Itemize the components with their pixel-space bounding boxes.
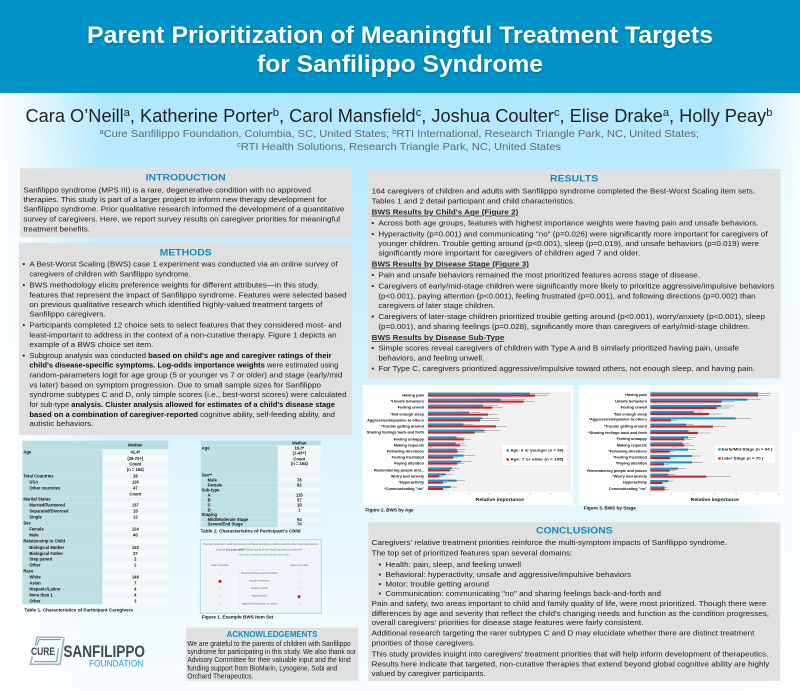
authors: Cara O’Neill <box>26 106 123 126</box>
methods bullet list: for sub-type analysis. Cluster analysis allowed for estimates of a child's disease stage <box>29 400 335 409</box>
acknowledgements text: syndrome for participating in this study. We also thank our <box>187 647 356 656</box>
results by disease stage: caregivers of later stage children. <box>378 301 495 310</box>
conclusions text: Caregivers' relative treatment priorities reinforce the multi-symptom impacts of Sanfilippo syndrome. <box>372 538 727 547</box>
introduction text: therapies. This study is part of a larger project to inform new therapy development for <box>23 195 327 204</box>
authors: c <box>554 107 560 119</box>
category labels: Worry and anxiety <box>391 474 425 478</box>
authors: , Katherine Porter <box>130 106 273 126</box>
table 1: characteristics of participant caregivers: Total Countries <box>23 474 54 479</box>
table 2: characteristics of participant's child: 82 <box>297 483 302 488</box>
table 1: characteristics of participant caregivers: Other <box>29 563 41 568</box>
table 1: characteristics of participant caregivers: Count <box>129 492 142 497</box>
table 1: characteristics of participant caregivers: Race <box>23 569 34 574</box>
logo: Cure Sanfilippo Foundation: FOUNDATION <box>89 658 143 668</box>
category labels <box>587 393 648 491</box>
conclusions text: Behavioral: hyperactivity, unsafe and aggressive/impulsive behaviors <box>385 570 631 579</box>
table 1: characteristics of participant caregivers: (28-70+) <box>127 456 144 461</box>
category labels: *Trouble getting around <box>604 424 648 428</box>
results by child's age: ▪ <box>371 230 374 239</box>
acknowledgements text: funding support from BioMarin, Lysogene, Sobi and <box>187 663 337 672</box>
table 1: characteristics of participant caregivers: 148 <box>132 575 139 580</box>
affiliations: b <box>392 129 396 136</box>
x axis: 5 <box>757 494 759 496</box>
legend <box>714 445 775 463</box>
figure 1: example BWS item set: Most important <box>211 563 229 567</box>
conclusions text: Results here indicate that targeted, non-curative therapies that extend beyond global cognitive ability are highly <box>372 660 769 669</box>
table 2: characteristics of participant's child: B <box>208 497 211 502</box>
table 1: characteristics of participant caregivers: White <box>29 575 41 580</box>
table 2: characteristics of participant's child: C <box>208 502 211 507</box>
results by disease sub-type <box>371 333 755 373</box>
results by child's age: significantly more important for caregivers of children aged 7 and older. <box>378 249 640 258</box>
conclusions text: Motor: trouble getting around <box>385 580 489 589</box>
table 1: characteristics of participant caregivers: 4 <box>134 593 137 598</box>
category labels: Paying attention <box>394 462 425 466</box>
table 1: characteristics of participant caregivers: More than 1 <box>29 593 53 598</box>
panel: introduction <box>20 168 352 237</box>
category labels: *Not enough sleep <box>613 412 648 416</box>
affiliations: Cure Sanfilippo Foundation, Columbia, SC, United States; <box>104 128 392 140</box>
table 1 caption: Table 1. Characteristics of Participant Caregivers <box>24 608 134 613</box>
table 1: characteristics of participant caregivers: Single <box>29 515 42 520</box>
figure 1: example BWS item set: improve for your child? Which would be the least important to improve? <box>216 547 303 551</box>
results by disease sub-type: BWS Results by Disease Sub-Type <box>372 333 504 342</box>
results by disease sub-type: behaviors, and feeling unwell. <box>378 353 484 362</box>
series: early/mid-stage <box>650 392 758 488</box>
results by disease stage: Pain and unsafe behaviors remained the most prioritized features across stage of disease. <box>378 271 700 280</box>
category labels: Making requests <box>617 444 647 448</box>
table 2: characteristics of participant's child: Sex** <box>202 473 213 478</box>
category labels: Remembering people and... <box>374 468 424 472</box>
x axis: 1 <box>671 494 672 496</box>
heading: introduction: INTRODUCTION <box>146 173 226 183</box>
legend: Later Stage (n = 70 ) <box>722 457 764 461</box>
figure 1: example BWS item set: Unsafe behaviors <box>249 578 270 582</box>
table 1: characteristics of participant caregivers: 19 <box>133 474 138 479</box>
x axis: 3 <box>489 494 491 496</box>
category labels: Feeling unhappy <box>394 437 425 441</box>
category labels: *Hyperactivity <box>398 481 425 485</box>
acknowledgements text <box>187 639 356 680</box>
methods bullet list: least-important to address in the context of a non-curative therapy. Figure 1 depicts an <box>29 331 337 340</box>
results by disease stage: Caregivers of later-stage children prioritized trouble getting around (p<0.001), worry/anxiety (p<0.001), sleep <box>378 312 765 321</box>
table 1: characteristics of participant caregivers: 40 <box>133 533 138 538</box>
category labels: *Worry and anxiety <box>612 475 648 479</box>
authors: , Holly Peay <box>669 106 766 126</box>
logo: Cure Sanfilippo Foundation <box>30 637 145 668</box>
figure 1: example BWS item set: Least important <box>290 563 308 567</box>
category labels: *Paying attention <box>616 462 648 466</box>
acknowledgements text: Advisory Committee for their valuable input and the kind <box>187 655 351 664</box>
conclusions text: ▪ <box>378 580 381 589</box>
methods bullet list: random-parameters logit for age group (5 or younger vs 7 or older) and stage (early/mid <box>29 371 342 380</box>
table 1: characteristics of participant caregivers: Step parent <box>29 557 53 562</box>
table 2: characteristics of participant's child: Median <box>292 441 307 446</box>
legend: Age: 6 or younger (n = 39) <box>510 449 564 453</box>
series: age 6 or younger <box>428 393 530 488</box>
figure 3: BWS by stage bar chart <box>578 385 785 505</box>
category labels: Feeling frustrated <box>392 456 425 460</box>
table 1: characteristics of participant caregivers: Separated/Divorced <box>29 509 69 514</box>
table 1: characteristics of participant caregivers: 37 <box>133 551 138 556</box>
panel: acknowledgements <box>186 628 358 681</box>
category labels: Following directions <box>387 450 424 454</box>
methods bullet list: vs later) based on symptom progression. Due to small sample sizes for Sanfilippo <box>29 380 321 389</box>
table 1: characteristics of participant caregivers: Marital Status <box>23 497 51 502</box>
table 1: characteristics of participant caregivers: USA <box>29 480 38 485</box>
figure 1: example BWS item set: If a new treatment could improve one of these symptoms, which would be the most important to <box>203 542 318 546</box>
methods bullet list: caregivers of children with Sanfilippo syndrome. <box>29 270 191 279</box>
table 1: characteristics of participant caregivers: 4 <box>134 587 137 592</box>
affiliations: RTI Health Solutions, Research Triangle Park, NC, United States <box>241 141 561 153</box>
conclusions text: overall caregivers' priorities for disease stage features were fairly consistent. <box>372 618 643 627</box>
table 1: characteristics of participant caregivers: 15 <box>133 509 138 514</box>
category labels: *Feeling frustrated <box>613 456 648 460</box>
category labels: Feeling unwell <box>398 406 424 410</box>
logo: Cure Sanfilippo Foundation: CURE <box>31 646 55 658</box>
methods bullet list <box>22 260 347 428</box>
methods bullet list: ▪ <box>22 260 25 269</box>
results intro: Tables 1 and 2 detail participant and child characteristics. <box>372 197 575 206</box>
category labels: Hyperactivity <box>623 481 648 485</box>
table 1: characteristics of participant caregivers: 41.4* <box>130 450 141 455</box>
table 2: characteristics of participant's child: Age <box>202 445 210 450</box>
title: for Sanfilippo Syndrome <box>257 51 543 78</box>
table 2: characteristics of participant's child: 70 <box>297 522 302 527</box>
x axis <box>427 494 572 502</box>
results by disease stage: Caregivers of early/mid-stage children were significantly more likely to prioritize aggressive/impulsive behaviors <box>378 282 774 291</box>
methods bullet list: ▪ <box>22 351 25 360</box>
category labels: Communicating "no" <box>609 487 647 491</box>
table 1: characteristics of participant caregivers: Hispanic/Latino <box>29 587 61 592</box>
table 1: characteristics of participant caregivers: Sex <box>23 521 31 526</box>
category labels: Unsafe behaviors <box>615 400 647 404</box>
authors: b <box>766 107 772 119</box>
category labels: Aggressive/impulsive to others <box>367 418 424 422</box>
authors: b <box>273 107 279 119</box>
results by child's age: Across both age groups, features with highest importance weights were having pain and unsafe behaviors. <box>378 219 758 228</box>
category labels: *Unsafe behaviors <box>391 400 424 404</box>
legend: Early/Mid-Stage (n = 94 ) <box>722 448 773 452</box>
methods bullet list: syndrome subtypes C and D, only simple scores (i.e., best-worst scores) were calculated <box>29 390 347 399</box>
table 1: characteristics of participant caregivers: Biological Father <box>29 551 63 556</box>
series: later stage <box>650 394 758 490</box>
x axis: 0 <box>427 494 429 496</box>
results by disease stage: ▪ <box>371 312 374 321</box>
panel: methods <box>19 243 352 435</box>
table 1: characteristics of participant caregivers: 122 <box>132 545 139 550</box>
results by disease sub-type: ▪ <box>371 364 374 373</box>
panel: results <box>368 169 780 378</box>
panel: conclusions <box>368 522 780 681</box>
heading: conclusions: CONCLUSIONS <box>536 526 613 536</box>
results by disease stage: ▪ <box>371 282 374 291</box>
methods bullet list: example of a BWS choice set item. <box>29 340 153 349</box>
category labels: *Communicating "no" <box>384 487 424 491</box>
authors: , Joshua Coulter <box>421 106 554 126</box>
conclusions text: ▪ <box>378 570 381 579</box>
results by disease sub-type: ▪ <box>371 344 374 353</box>
error bars <box>435 394 550 489</box>
table 2: characteristics of participant's child: Sub-type <box>202 488 220 493</box>
category labels: Feeling unhappy <box>617 437 648 441</box>
figure 1: example BWS item set: Sharing feelings back and forth <box>241 571 278 575</box>
table 1: characteristics of participant caregivers: Asian <box>29 581 41 586</box>
results by disease sub-type: Simple scores reveal caregivers of children with Type A and B similarly prioritized having pain, unsafe <box>378 344 739 353</box>
error bars <box>657 393 771 489</box>
x axis <box>650 494 780 502</box>
methods bullet list: based on a combination of caregiver-reported cognitive ability, self-feeding ability, and <box>29 410 335 419</box>
category labels: Making requests <box>394 443 424 447</box>
results by child's age: BWS Results by Child's Age (Figure 2) <box>372 208 519 217</box>
methods bullet list: ▪ <box>22 281 25 290</box>
table 2: characteristics of participant's child: 18.3* <box>294 445 305 450</box>
results by child's age <box>371 208 769 258</box>
table 1: characteristics of participant caregivers <box>22 441 168 604</box>
methods bullet list: features that represent the impact of Sanfilippo syndrome. Features were selected based <box>29 290 347 299</box>
category labels: Remembering people and places <box>587 469 647 473</box>
table 1: characteristics of participant caregivers: Other countries <box>29 486 61 491</box>
methods bullet list: Participants completed 12 choice sets to select features that they considered most- and <box>29 321 342 330</box>
authors: , Elise Drake <box>560 106 663 126</box>
table 1: characteristics of participant caregivers: Married/Partnered <box>29 503 65 508</box>
x axis: 1 <box>448 494 449 496</box>
methods bullet list: autistic behaviors. <box>29 419 93 428</box>
results by disease sub-type: For Type C, caregivers prioritized aggressive/impulsive toward others, not enough sleep, and having pain. <box>378 364 755 373</box>
figure 1: example BWS item set: Click here to a reminder about what the items mean. <box>238 552 290 556</box>
figure 1: example BWS item set: Aggressive/impulsive to others <box>241 601 278 605</box>
table 1: characteristics of participant caregivers: 124 <box>132 527 139 532</box>
results by disease stage: (p=0.001), and sharing feelings (p=0.028), significantly more than caregivers of early/mid-stage children. <box>378 322 750 331</box>
results by disease stage: (p<0.001), paying attention (p<0.001), feeling frustrated (p=0.001), and following directions (p=0.002) than <box>378 292 756 301</box>
authors: a <box>663 107 670 119</box>
x axis: 4 <box>509 494 511 496</box>
figure 2 caption: Figure 2. BWS by Age <box>365 507 414 512</box>
table 2: characteristics of participant's child: Severe/End Stage <box>208 522 243 527</box>
conclusions text: This study provides insight into caregivers' treatment priorities that will help inform development of therapeutics. <box>372 650 768 659</box>
results by disease stage <box>371 260 774 331</box>
category labels: *Following directions <box>608 450 647 454</box>
methods bullet list: child's disease-specific symptoms. Log-odds importance weights were estimated using <box>29 361 338 370</box>
results by child's age: Hyperactivity (p=0.001) and communicating "no" (p=0.026) were significantly more important for caregivers of <box>378 230 769 239</box>
conclusions text: differences by age and severity that reflect the child's changing needs and function as the condition progresses, <box>372 609 769 618</box>
category labels: *Aggressive/impulsive to others <box>589 418 647 422</box>
conclusions text: Additional research targeting the rarer subtypes C and D may elucidate whether there are distinct treatment <box>372 629 755 638</box>
conclusions text: Health: pain, sleep, and feeling unwell <box>385 560 521 569</box>
x axis: 2 <box>468 494 470 496</box>
conclusions text: Communication: communicating "no" and sharing feelings back-and-forth and <box>385 589 661 598</box>
affiliations: a <box>100 129 104 136</box>
category labels: *Trouble getting around <box>381 424 425 428</box>
conclusions text: The top set of prioritized features span several domains: <box>372 549 572 558</box>
introduction text: survey of caregivers. Here, we report survey results on caregiver priorities for meaningful <box>23 215 340 224</box>
table 2 caption: Table 2. Characteristics of Participant's Child <box>201 529 301 534</box>
table 2: characteristics of participant's child: 115 <box>296 492 303 497</box>
legend <box>502 445 567 465</box>
table 1: characteristics of participant caregivers: 47 <box>133 486 138 491</box>
introduction text: Sanfilippo syndrome. Prior qualitative research informed the development of a quantitative <box>23 205 344 214</box>
conclusions text: priorities of those caregivers. <box>372 639 475 648</box>
x axis: 0 <box>650 494 652 496</box>
heading: acknowledgements: ACKNOWLEDGEMENTS <box>227 630 318 639</box>
table 1: characteristics of participant caregivers: Male <box>29 533 39 538</box>
title: Parent Prioritization of Meaningful Treatment Targets <box>87 22 713 49</box>
acknowledgements text: Orchard Therapeutics. <box>187 671 253 680</box>
category labels: *Not enough sleep <box>390 413 425 417</box>
table 1: characteristics of participant caregivers: Relationship to Child <box>23 539 65 544</box>
table 1: characteristics of participant caregivers: 116 <box>132 480 139 485</box>
table 1: characteristics of participant caregivers: 2 <box>134 557 137 562</box>
figure 3 caption: Figure 3. BWS by Stage <box>584 506 637 511</box>
x axis: 6 <box>778 494 780 496</box>
category labels: Sharing feelings back and forth <box>367 431 425 435</box>
methods bullet list: ▪ <box>22 321 25 330</box>
table 1: characteristics of participant caregivers: 3 <box>134 599 137 604</box>
acknowledgements text: We are grateful to the parents of children with Sanfilippo <box>187 639 351 648</box>
authors: a <box>124 107 131 119</box>
authors: c <box>416 107 422 119</box>
table 1: characteristics of participant caregivers: Count <box>129 461 142 466</box>
table 2: characteristics of participant's child <box>201 441 321 527</box>
table 1: characteristics of participant caregivers: (n = 164) <box>127 467 144 472</box>
results by child's age: younger children. Trouble getting around (p<0.001), sleep (p=0.019), and unsafe behaviors (p=0.019) were <box>378 239 759 248</box>
results intro: 164 caregivers of children and adults with Sanfilippo syndrome completed the Best-Worst Scaling item sets. <box>372 187 755 196</box>
table 2: characteristics of participant's child: 78 <box>297 478 302 483</box>
x axis: 6 <box>550 494 552 496</box>
category labels: Having pain <box>402 394 425 398</box>
table 1: characteristics of participant caregivers: Age <box>23 450 32 455</box>
figure 1: example BWS item set: Feeling unwell <box>251 586 268 590</box>
figure 1: example BWS item set <box>200 540 321 613</box>
affiliations: RTI International, Research Triangle Park, NC, United States; <box>396 128 699 140</box>
conclusions text: ▪ <box>378 589 381 598</box>
x axis: 3 <box>714 494 716 496</box>
conclusions text <box>372 538 769 678</box>
table 1: characteristics of participant caregivers: 12 <box>133 515 138 520</box>
introduction text: treatment benefits. <box>23 225 90 234</box>
table 2: characteristics of participant's child: 1 <box>298 507 301 512</box>
header banner <box>0 0 800 93</box>
title <box>87 22 713 78</box>
category labels: Feeling unwell <box>621 406 647 410</box>
x axis: 2 <box>692 494 694 496</box>
x axis: 5 <box>530 494 532 496</box>
affiliations <box>100 128 699 153</box>
figure 1: example BWS item set: Hyperactivity <box>252 594 268 598</box>
table 2: characteristics of participant's child: (n = 164) <box>291 461 308 466</box>
x axis: 7 <box>570 494 572 496</box>
heading: methods: METHODS <box>160 248 212 258</box>
results by disease stage: BWS Results by Disease Stage (Figure 3) <box>372 260 529 269</box>
legend: Age: 7 or older (n = 105) <box>510 458 564 462</box>
conclusions text: ▪ <box>378 560 381 569</box>
results by child's age: ▪ <box>371 219 374 228</box>
table 1: characteristics of participant caregivers: 137 <box>132 503 139 508</box>
table 1: characteristics of participant caregivers: 7 <box>134 581 137 586</box>
methods bullet list: A Best-Worst Scaling (BWS) case 1 experiment was conducted via an online survey of <box>29 260 339 269</box>
table 2: characteristics of participant's child: Mild/Moderate Stage <box>208 517 249 522</box>
affiliations: c <box>237 142 241 149</box>
table 2: characteristics of participant's child: Count <box>293 456 306 461</box>
category labels <box>367 394 425 491</box>
methods bullet list: Subgroup analysis was conducted based on child's age and caregiver ratings of their <box>29 351 332 360</box>
table 2: characteristics of participant's child: 37 <box>297 497 302 502</box>
figure 2: BWS by age bar chart <box>363 385 573 505</box>
table 1: characteristics of participant caregivers: Median <box>128 443 143 448</box>
table 2: characteristics of participant's child: (1-43+) <box>293 451 307 456</box>
figure 1 caption: Figure 1. Example BWS Item Set <box>202 614 274 619</box>
results by disease stage: ▪ <box>371 271 374 280</box>
table 2: characteristics of participant's child: Female <box>208 483 223 488</box>
table 2: characteristics of participant's child: A <box>208 492 211 497</box>
table 2: characteristics of participant's child: D <box>208 507 211 512</box>
table 1: characteristics of participant caregivers: Other <box>29 599 41 604</box>
heading: results: RESULTS <box>550 174 598 184</box>
table 1: characteristics of participant caregivers: Biological Mother <box>29 545 65 550</box>
methods bullet list: on previous qualitative research which identified highly-valued treatment targets of <box>29 300 323 309</box>
methods bullet list: BWS methodology elicits preference weights for different attributes—in this study, <box>29 281 319 290</box>
table 2: characteristics of participant's child: Staging <box>202 512 217 517</box>
x axis: Relative importance <box>476 497 524 502</box>
category labels: Having pain <box>625 393 648 397</box>
table 2: characteristics of participant's child: 10 <box>297 502 302 507</box>
authors: , Carol Mansfield <box>279 106 416 126</box>
conclusions text: valued by caregiver participants. <box>372 669 486 678</box>
methods bullet list: Sanfilippo caregivers. <box>29 310 106 319</box>
category labels: *Sharing feelings back and forth <box>588 431 648 435</box>
table 2: characteristics of participant's child: Male <box>208 478 218 483</box>
logo: Cure Sanfilippo Foundation: SANFILIPPO <box>63 642 145 661</box>
conclusions text: Pain and safety, two areas important to child and family quality of life, were most prioritized. Though there were <box>372 599 766 608</box>
introduction text <box>23 186 344 234</box>
series: age 7 or older <box>428 395 535 490</box>
x axis: Relative importance <box>691 497 739 502</box>
results intro <box>372 187 755 206</box>
x axis: 4 <box>735 494 737 496</box>
table 2: characteristics of participant's child: 94 <box>297 517 302 522</box>
introduction text: Sanfilippo syndrome (MPS III) is a rare, degenerative condition with no approved <box>23 186 311 195</box>
table 1: characteristics of participant caregivers: 2 <box>134 563 137 568</box>
table 1: characteristics of participant caregivers: Female <box>29 527 44 532</box>
